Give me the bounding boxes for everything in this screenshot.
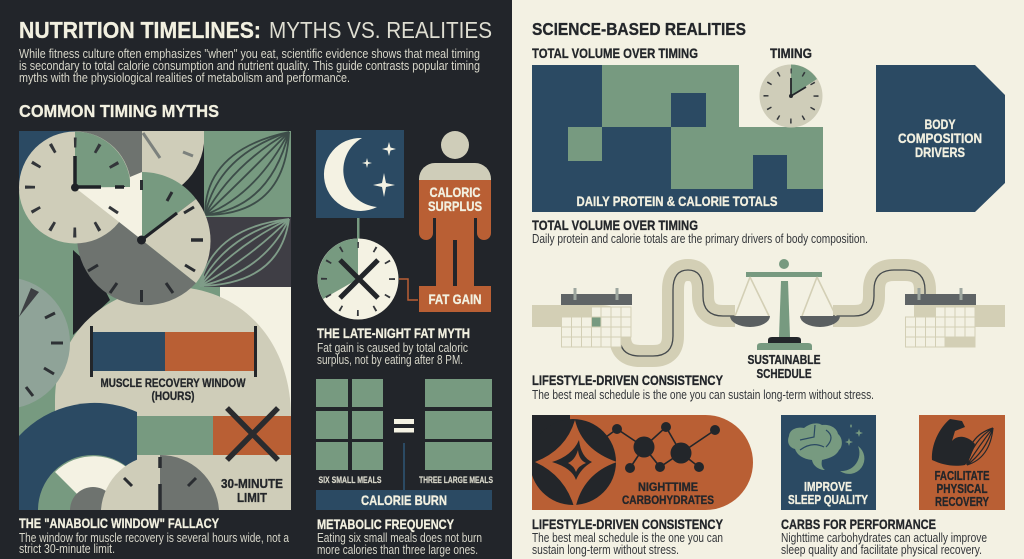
icon: moon and stars [316,130,404,218]
heading and text: anabolic window fallacy: strict 30-minute limit. [19,542,115,556]
navy ring [19,403,137,510]
icon: molecule [606,422,720,473]
wedge tick marks [109,207,118,213]
six small meals grid [316,379,383,470]
icon: brain fold lines [800,425,831,450]
heading and text: metabolic frequency: more calories than three large ones. [317,543,478,557]
heading and text: lifestyle-driven consistency 2: The best meal schedule is the one you can [532,531,723,545]
icon: human figure caloric surplus: SURPLUS [428,199,482,214]
heading and text: total volume over timing: Daily protein and calorie totals are the primary drivers of body composition. [532,232,868,246]
bottom strip [137,416,291,510]
icon: flexed arm [932,419,975,466]
title [19,17,492,43]
white wedge [75,172,142,240]
clock 1 hands [71,156,124,192]
panel: facilitate physical recovery: PHYSICAL [936,482,988,496]
label: 30-minute limit: LIMIT [237,490,267,505]
chart: volume blocks [532,65,823,212]
intro text block [19,47,480,85]
title: NUTRITION TIMELINES: [19,17,261,43]
label: 30-minute limit: 30-MINUTE [221,476,283,491]
icon: timing clock [760,64,822,128]
icon: bottom half clock [101,455,219,510]
inner ring sectors [38,455,126,510]
icon: cross [227,408,278,460]
heading and text: late-night fat myth: Fat gain is caused by total caloric [317,341,468,355]
panel: facilitate physical recovery: RECOVERY [935,495,990,509]
title: MYTHS VS. REALITIES [269,17,492,43]
label: total volume over timing: TOTAL VOLUME OVER TIMING [532,45,698,61]
three large meals grid [425,379,492,470]
label: sustainable schedule: SCHEDULE [756,367,812,381]
intro text block: myths with the physiological realities of metabolism and performance. [19,71,350,85]
heading and text: anabolic window fallacy [19,515,289,556]
heading and text: late-night fat myth: THE LATE-NIGHT FAT MYTH [317,325,470,341]
heading and text: carbs for performance: CARBS FOR PERFORMANCE [781,516,936,532]
heading and text: total volume over timing: TOTAL VOLUME OVER TIMING [532,217,698,233]
heading and text: late-night fat myth: surplus, not by eating after 8 PM. [317,353,463,367]
panel: nighttime carbohydrates [530,415,753,510]
winding path [532,270,1005,356]
heading and text: metabolic frequency: METABOLIC FREQUENCY [317,516,455,532]
meal labels: THREE LARGE MEALS [419,475,493,485]
panel: nighttime carbohydrates: CARBOHYDRATES [622,493,714,507]
label: muscle recovery window: MUSCLE RECOVERY WINDOW [100,376,246,390]
icon: right calendar [905,288,976,347]
heading: science-based realities: SCIENCE-BASED REALITIES [532,19,746,39]
icon: muscle fibers [967,428,993,465]
heading and text: lifestyle-driven consistency 2 [532,516,724,557]
icon: large clock top-left [19,132,131,244]
recovery window bar [90,326,257,377]
panel: body composition drivers [876,65,1005,212]
dark wedge [73,250,110,335]
heading: common timing myths: COMMON TIMING MYTHS [19,101,219,121]
sage dome [55,287,291,417]
white corner [220,287,291,417]
heading and text: lifestyle-driven consistency [532,372,874,402]
heading and text: lifestyle-driven consistency 2: LIFESTYLE-DRIVEN CONSISTENCY [532,516,724,532]
panel: body composition drivers: COMPOSITION [898,131,982,146]
icon: human figure caloric surplus: CALORIC [430,185,481,200]
heading and text: metabolic frequency [317,516,482,557]
connector line: moon to clock [357,218,360,242]
heading and text: late-night fat myth [317,325,470,367]
heading and text: lifestyle-driven consistency: LIFESTYLE-DRIVEN CONSISTENCY [532,372,724,388]
icon: muscle fibers on green [204,131,291,217]
panel: improve sleep quality [781,415,876,510]
panel: facilitate physical recovery [919,415,1005,510]
icon: crossed-out clock [318,238,398,320]
icon: left calendar [561,288,632,347]
heading and text: total volume over timing [532,217,868,246]
panel: improve sleep quality: IMPROVE [804,479,852,494]
icon: balance scale [730,259,840,350]
icon: equals sign [394,419,414,432]
icon: muscle fibers on plum [200,217,291,287]
heading and text: anabolic window fallacy: THE "ANABOLIC WINDOW" FALLACY [19,515,220,531]
panel: improve sleep quality: SLEEP QUALITY [788,492,868,507]
icon: top clock fragment [142,131,204,185]
panel: facilitate physical recovery: FACILITATE [934,469,990,483]
icon: crescent moon [840,446,864,474]
heading and text: anabolic window fallacy: The window for muscle recovery is several hours wide, not a [19,531,289,545]
left dark background [0,0,512,559]
right cream background [512,0,1024,559]
chart: volume blocks: DAILY PROTEIN & CALORIE TOTALS [576,194,778,209]
heading and text: metabolic frequency: Eating six small meals does not burn [317,531,482,545]
icon: left gray clock [19,278,70,408]
meal labels [318,475,493,485]
label: 30-minute limit [221,478,283,502]
heading and text: carbs for performance [781,516,987,557]
heading and text: lifestyle-driven consistency 2: sustain long-term without stress. [532,543,679,557]
label: sustainable schedule: SUSTAINABLE [748,353,820,367]
calorie burn bar: CALORIE BURN [361,492,447,508]
panel: body composition drivers: BODY [924,117,956,132]
intro text block: is secondary to total calorie consumption and nutrient quality. This guide contrasts popular timing [19,59,480,73]
connector line: clock to fat gain [399,279,418,300]
label: muscle recovery window [100,376,246,403]
meal labels: SIX SMALL MEALS [318,475,382,485]
icon: human figure caloric surplus [419,131,491,312]
panel: nighttime carbohydrates: NIGHTTIME [638,480,698,494]
icon: central clock upper sectors [137,172,211,283]
icon: brain [788,423,842,470]
intro text block: While fitness culture often emphasizes "when" you eat, scientific evidence shows that meal timing [19,47,480,61]
icon: central clock gray sector [78,222,196,306]
panel: body composition drivers: DRIVERS [915,145,965,160]
label: muscle recovery window: (HOURS) [152,389,195,403]
icon: human figure caloric surplus: FAT GAIN [428,292,482,307]
icon: star emblem [530,415,617,510]
heading and text: carbs for performance: sleep quality and facilitate physical recovery. [781,543,982,557]
calorie burn bar [316,443,492,510]
panel: anabolic window collage [19,131,291,510]
icon: small stars [845,424,863,446]
heading and text: lifestyle-driven consistency: The best meal schedule is the one you can sustain long-term without stress. [532,388,874,402]
label: sustainable schedule [748,353,820,381]
label: timing: TIMING [770,45,812,61]
